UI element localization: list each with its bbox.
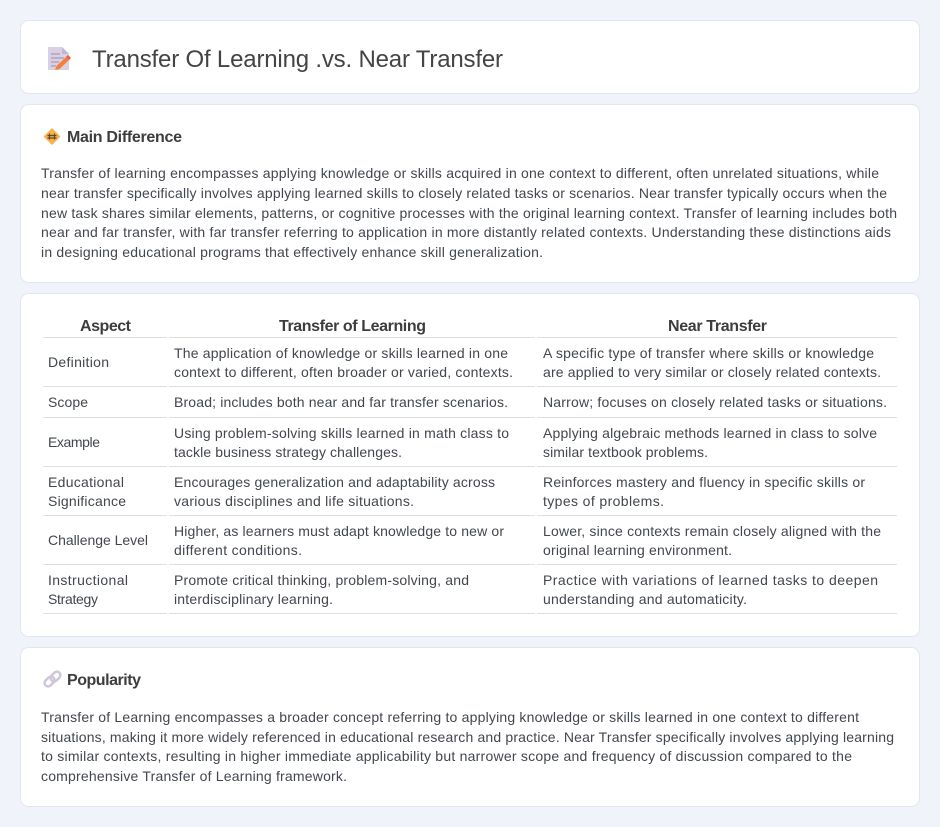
text block: main difference: near transfer specifically involves applying learned skills to closely related tasks or scenarios. Near transfer typically occurs when the bbox=[41, 185, 887, 201]
text block: popularity: Transfer of Learning encompasses a broader concept referring to applying knowledge or skills learned in one context to different bbox=[41, 709, 859, 725]
row: definition: The application of knowledge or skills learned in one bbox=[174, 345, 508, 361]
icon: chain link bbox=[43, 670, 62, 688]
panel: popularity bbox=[20, 648, 920, 806]
table header bbox=[80, 318, 767, 335]
text block: popularity: situations, making it more widely referenced in educational research and practice. Near Transfer specifically involves applying learning bbox=[41, 729, 894, 745]
heading: popularity: Popularity bbox=[67, 672, 141, 689]
text block: main difference bbox=[41, 165, 897, 260]
icon: warning diamond bbox=[44, 128, 60, 145]
row: example: tackle business strategy challenges. bbox=[174, 444, 402, 460]
text block: popularity bbox=[41, 709, 894, 784]
text block: main difference: near and far transfer, with far transfer referring to application in more distantly related contexts. Understanding these distinctions aids bbox=[41, 224, 891, 240]
row: instructional strategy: understanding and automaticity. bbox=[543, 591, 747, 607]
row: educational significance: Educational bbox=[48, 474, 124, 490]
row: definition: A specific type of transfer where skills or knowledge bbox=[543, 345, 874, 361]
panel: comparison table bbox=[20, 294, 920, 636]
row: scope: Broad; includes both near and far transfer scenarios. bbox=[174, 394, 508, 410]
table header: Transfer of Learning bbox=[279, 318, 426, 335]
row: example: Example bbox=[48, 434, 100, 450]
table header: Aspect bbox=[80, 318, 132, 335]
row: educational significance: various disciplines and life situations. bbox=[174, 493, 414, 509]
panel: title header bbox=[20, 20, 920, 94]
text block: main difference: Transfer of learning encompasses applying knowledge or skills acquired in one context to different, often unrelated situations, while bbox=[41, 165, 879, 181]
row: challenge level: Higher, as learners must adapt knowledge to new or bbox=[174, 523, 504, 539]
row: educational significance bbox=[48, 474, 865, 509]
text block: popularity: comprehensive Transfer of Learning framework. bbox=[41, 768, 347, 784]
row: challenge level: Lower, since contexts remain closely aligned with the bbox=[543, 523, 881, 539]
row: scope: Scope bbox=[48, 394, 88, 410]
row: instructional strategy: Promote critical thinking, problem-solving, and bbox=[174, 572, 469, 588]
row: instructional strategy bbox=[48, 572, 878, 607]
row: example: similar textbook problems. bbox=[543, 444, 708, 460]
row: definition bbox=[48, 345, 881, 380]
row: definition: are applied to very similar or closely related contexts. bbox=[543, 364, 881, 380]
row: challenge level: Challenge Level bbox=[48, 532, 148, 548]
row: example: Using problem-solving skills learned in math class to bbox=[174, 425, 509, 441]
row: example bbox=[48, 425, 877, 460]
row: scope: Narrow; focuses on closely related tasks or situations. bbox=[543, 394, 887, 410]
text block: popularity: to similar contexts, resulting in higher immediate applicability but narrower scope and frequency of discussion compared to the bbox=[41, 748, 852, 764]
row: educational significance: Encourages generalization and adaptability across bbox=[174, 474, 495, 490]
row: definition: Definition bbox=[48, 354, 109, 370]
panel: main difference bbox=[20, 104, 920, 282]
row: example: Applying algebraic methods learned in class to solve bbox=[543, 425, 877, 441]
row: definition: context to different, often broader or varied, contexts. bbox=[174, 364, 513, 380]
icon: document with pencil bbox=[48, 47, 71, 70]
row: educational significance: Reinforces mastery and fluency in specific skills or bbox=[543, 474, 865, 490]
title: Transfer Of Learning .vs. Near Transfer bbox=[92, 46, 503, 73]
row: scope bbox=[48, 394, 887, 410]
text block: main difference: in designing educational programs that effectively enhance skill generalization. bbox=[41, 244, 543, 260]
row: challenge level bbox=[48, 523, 881, 558]
heading: main difference: Main Difference bbox=[67, 129, 182, 146]
table header: Near Transfer bbox=[668, 318, 767, 335]
row: educational significance: Significance bbox=[48, 493, 126, 509]
row: instructional strategy: Strategy bbox=[48, 591, 98, 607]
row: instructional strategy: Practice with variations of learned tasks to deepen bbox=[543, 572, 878, 588]
row: educational significance: types of problems. bbox=[543, 493, 664, 509]
row: instructional strategy: Instructional bbox=[48, 572, 128, 588]
row: challenge level: different conditions. bbox=[174, 542, 302, 558]
text block: main difference: new task shares similar elements, patterns, or cognitive processes with the original learning context. Transfer of learning includes both bbox=[41, 205, 897, 221]
row: challenge level: original learning environment. bbox=[543, 542, 732, 558]
row: instructional strategy: interdisciplinary learning. bbox=[174, 591, 333, 607]
